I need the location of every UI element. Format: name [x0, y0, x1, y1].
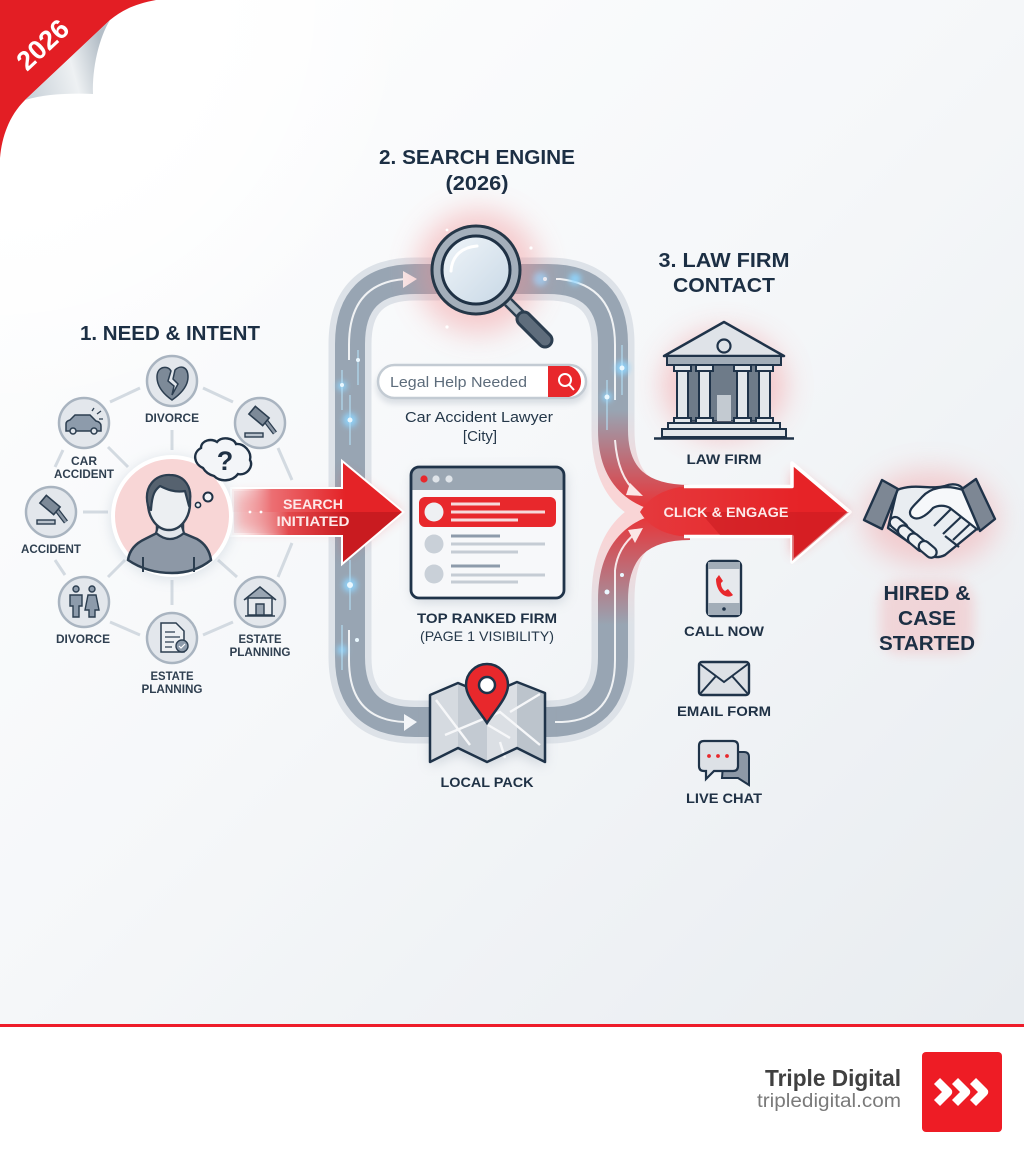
label: local pack: LOCAL PACK: [440, 774, 534, 790]
label: hired and case started: HIRED &: [884, 583, 970, 605]
label: hired and case started: CASE: [898, 608, 956, 630]
brand name: Triple Digital: [765, 1065, 901, 1091]
section 3 heading: law firm contact: CONTACT: [673, 275, 775, 297]
live chat: [686, 741, 762, 806]
label: search initiated: SEARCH: [283, 496, 343, 512]
label: top ranked firm: [417, 610, 557, 644]
node: estate planning house: [230, 577, 290, 659]
icon: law firm building: [654, 322, 794, 440]
live chat: LIVE CHAT: [686, 790, 762, 806]
footer band: [0, 1024, 1024, 1154]
search bar: [376, 365, 588, 404]
section 2 heading: search engine: (2026): [446, 173, 508, 195]
corner ribbon: 2026 page curl: 2026: [11, 13, 75, 76]
track flow lines and arrows: [349, 271, 643, 731]
thought bubble: ?: [217, 446, 233, 476]
query text: Car Accident Lawyer: [405, 409, 553, 426]
node: accident gavel: [21, 487, 82, 556]
node: divorce couple: [56, 577, 110, 646]
node: divorce broken heart: DIVORCE: [145, 411, 199, 425]
top ranked result: [419, 497, 556, 527]
icon: map with pin: [430, 664, 545, 766]
email form: EMAIL FORM: [677, 703, 771, 719]
call now: [684, 561, 765, 639]
node: estate planning document: [142, 613, 202, 696]
node: divorce broken heart: [145, 356, 199, 425]
node: estate planning house: PLANNING: [230, 645, 290, 659]
arrow: click and engage: [640, 463, 850, 562]
label: search initiated: [276, 496, 350, 529]
query text: [City]: [463, 428, 497, 445]
icon: magnifying glass: [416, 210, 545, 340]
brand name: tripledigital.com: [757, 1091, 901, 1112]
node: estate planning document: ESTATE: [150, 669, 194, 683]
section 3 heading: law firm contact: [658, 250, 790, 297]
icon: handshake: [862, 470, 998, 566]
node: estate planning document: PLANNING: [142, 682, 202, 696]
section 2 heading: search engine: [379, 147, 575, 195]
call now: CALL NOW: [684, 623, 765, 639]
node: accident gavel: ACCIDENT: [21, 542, 82, 556]
person with question: [110, 438, 251, 580]
label: top ranked firm: TOP RANKED FIRM: [417, 610, 557, 626]
node: estate planning house: ESTATE: [238, 632, 282, 646]
node: car accident: [54, 398, 115, 481]
search bar: Legal Help Needed: [390, 374, 527, 391]
arrow: search initiated: [232, 463, 402, 562]
section 3 heading: law firm contact: 3. LAW FIRM: [658, 250, 790, 272]
logo: triple chevrons: [922, 1052, 1002, 1132]
node: gavel top right: [235, 398, 285, 448]
node: car accident: CAR: [71, 454, 97, 468]
spoke ring: [55, 388, 292, 635]
node: car accident: ACCIDENT: [54, 467, 115, 481]
corner ribbon: 2026 page curl: [0, 0, 156, 158]
brand name: [757, 1065, 901, 1112]
query text: [405, 409, 553, 445]
heading: need and intent: 1. NEED & INTENT: [80, 323, 260, 345]
browser results window: [411, 467, 566, 602]
email form: [677, 662, 771, 719]
label: hired and case started: [879, 582, 975, 655]
blue data glows on the track: [337, 272, 629, 670]
section 2 heading: search engine: 2. SEARCH ENGINE: [379, 147, 575, 169]
pipeline track around search engine: [350, 279, 690, 722]
section 1: need and intent: [21, 323, 292, 696]
thought bubble: [195, 438, 251, 508]
label: law firm: LAW FIRM: [686, 451, 762, 467]
label: click and engage: CLICK & ENGAGE: [664, 504, 788, 520]
label: search initiated: INITIATED: [276, 513, 350, 529]
label: top ranked firm: (PAGE 1 VISIBILITY): [420, 628, 554, 644]
label: hired and case started: STARTED: [879, 633, 975, 655]
node: divorce couple: DIVORCE: [56, 632, 110, 646]
other results: [424, 534, 545, 584]
